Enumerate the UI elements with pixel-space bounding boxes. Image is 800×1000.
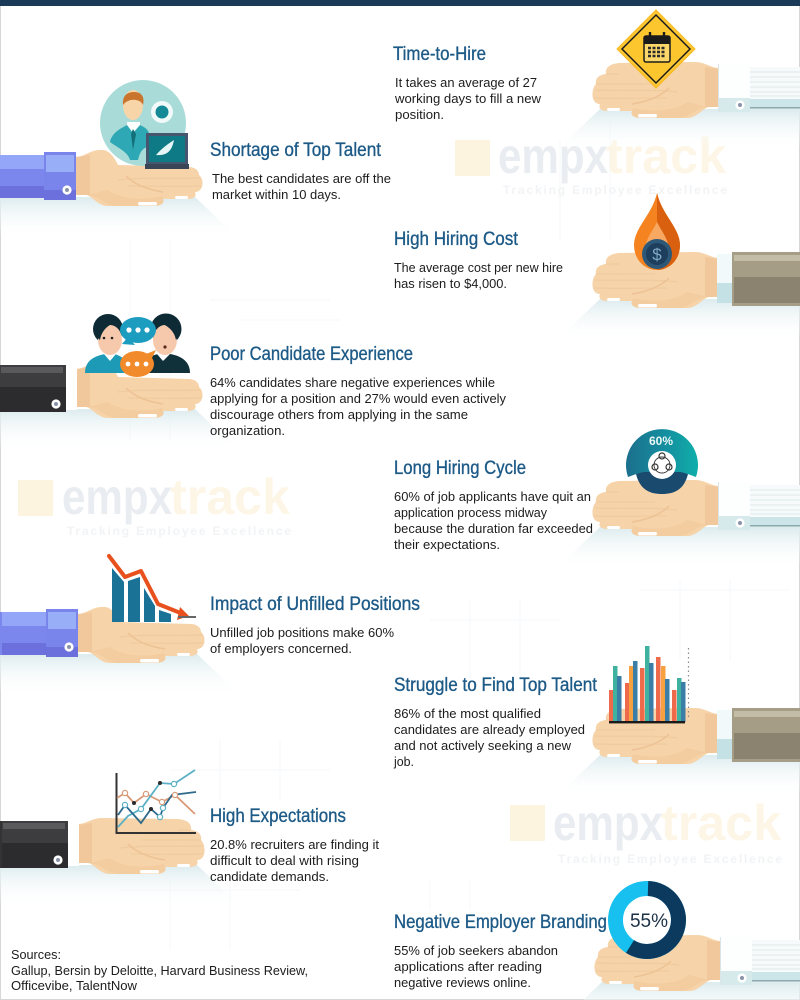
heading: Time-to-Hire [393,44,486,65]
panel: Poor Candidate Experience [0,314,506,450]
watermark: lower right [510,795,782,866]
text block [210,375,506,438]
heading: Shortage of Top Talent [210,140,382,161]
text block: negative reviews online. [394,975,531,990]
hand with dark sleeve [0,818,240,906]
text block: 64% candidates share negative experiences while [210,375,495,390]
icon: line chart [116,770,196,833]
watermark: middle left: Tracking Employee Excellence [67,524,291,538]
watermark: middle left [18,469,291,538]
panel: Long Hiring Cycle [394,429,800,568]
text block: candidates are already employed [394,722,585,737]
text block: It takes an average of 27 [395,75,537,90]
hand with khaki sleeve [557,708,800,796]
panel: High Hiring Cost [394,193,800,340]
icon: 55% donut chart [616,888,679,952]
icon: 60% circular gauge: 60% [649,434,673,448]
top band [0,0,800,6]
hand with khaki sleeve [557,252,800,340]
text block: application process midway [394,505,547,520]
text block: The average cost per new hire [394,260,563,275]
heading: High Hiring Cost [394,229,519,250]
text block: 20.8% recruiters are finding it [210,837,379,852]
text block: 86% of the most qualified [394,706,541,721]
text block: of employers concerned. [210,641,352,656]
text block [212,171,391,202]
text block [394,489,593,552]
heading: Impact of Unfilled Positions [210,594,420,615]
text block: The best candidates are off the [212,171,391,186]
icon: flame with dollar coin: $ [652,245,662,264]
text block: because the duration far exceeded [394,521,593,536]
hand with white sleeve [559,935,800,1000]
watermark: middle left: track [170,469,290,525]
text block [394,260,563,291]
text block: has risen to $4,000. [394,276,507,291]
hand with dark sleeve [0,362,238,450]
icon: two people chatting [85,314,190,377]
icon: person with laptop [100,80,189,169]
sources: Officevibe, TalentNow [11,978,137,993]
watermark: top right [455,128,727,197]
text block [394,943,558,990]
text block: market within 10 days. [212,187,341,202]
text block [393,706,585,769]
sources: Sources: [11,947,61,962]
text block [394,75,541,122]
heading: Long Hiring Cycle [394,458,526,479]
hand with white sleeve [557,480,800,568]
sources: Gallup, Bersin by Deloitte, Harvard Business Review, [11,963,308,978]
text block: applying for a position and 27% would even actively [210,391,506,406]
heading: High Expectations [210,806,346,827]
icon: flame with dollar coin [634,193,680,270]
text block: 60% of job applicants have quit an [394,489,591,504]
text block: discourage others from applying in the same [210,407,468,422]
heading: Struggle to Find Top Talent [394,675,598,696]
icon: column chart [609,646,688,723]
watermark: top right: empx [498,128,608,184]
text block [210,625,394,656]
panel: Time-to-Hire [393,10,800,150]
hand with blue sleeve [0,150,238,238]
text block: their expectations. [394,537,500,552]
text block: applications after reading [394,959,542,974]
icon: 60% circular gauge [626,429,698,494]
panel: Struggle to Find Top Talent [393,646,800,796]
icon: calendar warning sign [617,10,695,88]
heading: Negative Employer Branding [394,912,607,933]
text block [210,837,379,884]
panel: Shortage of Top Talent [0,80,391,238]
panel: Impact of Unfilled Positions [0,556,420,695]
text block: candidate demands. [210,869,329,884]
text block: Unfilled job positions make 60% [210,625,394,640]
icon: 55% donut chart: 55% [630,911,668,932]
hand with white sleeve [557,62,800,150]
text block: and not actively seeking a new [394,738,571,753]
icon: falling bar chart [109,556,196,622]
text block: 55% of job seekers abandon [394,943,558,958]
watermark: middle left: empx [62,469,172,525]
sources [11,947,308,993]
panel: High Expectations [0,770,379,906]
text block: job. [393,754,414,769]
text block: working days to fill a new [394,91,541,106]
text block: difficult to deal with rising [210,853,359,868]
watermark: lower right: Tracking Employee Excellence [558,852,782,866]
heading: Poor Candidate Experience [210,344,413,365]
text block: position. [395,107,444,122]
watermark: top right: track [606,128,726,184]
text block: organization. [210,423,285,438]
watermark: lower right: track [661,795,781,851]
watermark: top right: Tracking Employee Excellence [503,183,727,197]
panel: Negative Employer Branding [394,888,800,1000]
watermark: lower right: empx [553,795,663,851]
hand with blue sleeve [0,607,240,695]
